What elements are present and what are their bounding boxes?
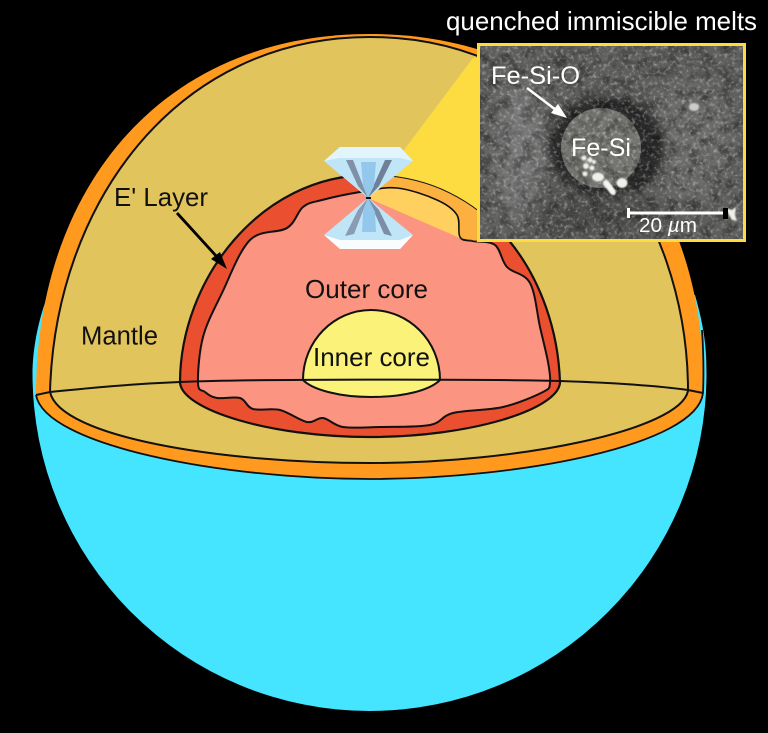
arrow: Fe-Si-O pointer: [527, 88, 567, 118]
label: E' Layer: E' Layer: [114, 182, 208, 212]
label: Outer core: Outer core: [305, 274, 428, 304]
inner core: [303, 310, 440, 397]
outer core: [198, 188, 550, 428]
highlighted wedge: [370, 58, 477, 242]
E' layer: [180, 175, 560, 437]
scale bar: [627, 208, 723, 218]
label: Fe-Si: Fe-Si: [571, 134, 631, 162]
label: Mantle: Mantle: [81, 322, 158, 350]
label: 20 µm: 20 µm: [639, 215, 697, 237]
crust layer: [36, 34, 703, 479]
inset: electron micrograph: [477, 43, 746, 242]
label: Inner core: Inner core: [313, 342, 430, 372]
arrow: E' layer pointer: [177, 213, 227, 269]
sphere: [32, 295, 706, 711]
icon: diamond anvil cell: [324, 147, 413, 249]
heading: quenched immiscible melts: quenched immiscible melts: [446, 6, 757, 36]
mantle: [50, 37, 688, 463]
crust lower outline: [36, 330, 703, 479]
equator line: [36, 380, 703, 395]
scale end mark: [723, 208, 728, 219]
label: Fe-Si-O: Fe-Si-O: [491, 62, 580, 90]
